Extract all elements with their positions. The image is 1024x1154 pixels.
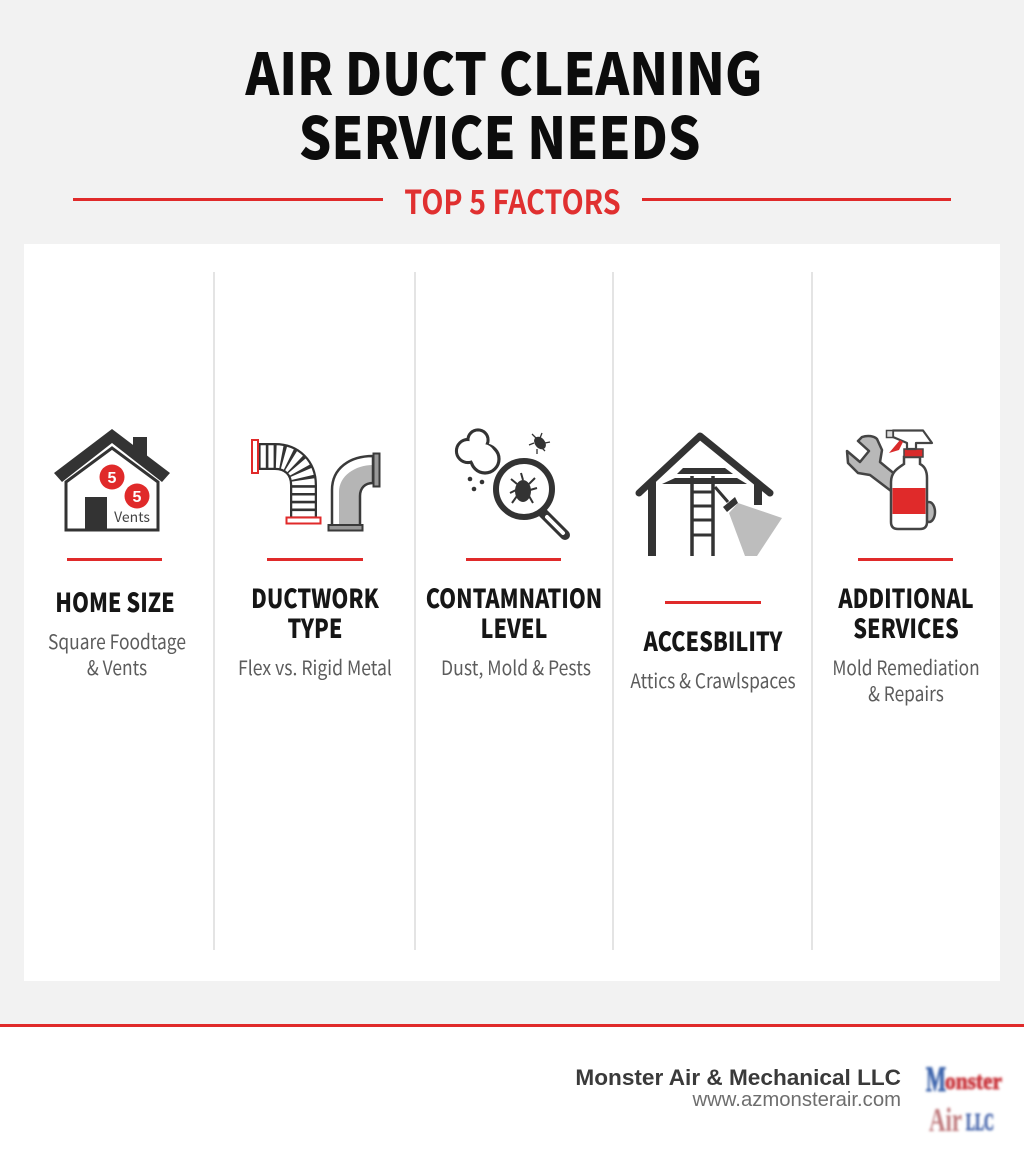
company name: Monster Air & Mechanical LLC [575,1065,901,1090]
column: accessibility [630,601,796,694]
heading [838,579,974,646]
heading [251,579,380,646]
description: Flex vs. Rigid Metal [238,652,392,681]
description: Mold Remediation [832,652,980,681]
icon: attic with ladder and flashlight [636,432,782,556]
heading: LEVEL [481,609,547,646]
column: home size [48,558,186,681]
description: & Vents [86,652,147,681]
subtitle with rules [73,176,951,224]
column: contamination level [426,558,602,681]
footer [0,1024,1024,1154]
description: Square Foodtage [48,626,185,655]
heading [426,579,602,646]
title: SERVICE NEEDS [299,92,700,176]
icon: house with vents: Vents [114,507,150,527]
heading: TYPE [288,609,342,646]
heading: CONTAMNATION [426,579,602,616]
icon: house with vents [54,429,170,532]
column: ductwork type [238,558,392,681]
panel: factors [24,244,1000,981]
heading: DUCTWORK [251,579,379,616]
title [245,28,762,176]
icon: house with vents: 5 [133,489,142,506]
subtitle text: TOP 5 FACTORS [404,176,621,224]
heading: HOME SIZE [55,583,175,620]
logo [924,1059,1004,1137]
icon: flex and rigid duct [251,439,380,532]
heading: SERVICES [853,609,959,646]
icon: house with vents: 5 [108,470,117,487]
description: Dust, Mold & Pests [441,652,591,681]
heading: ACCESBILITY [644,622,782,659]
description: & Repairs [868,678,944,707]
logo: onster [945,1069,1002,1095]
icon: wrench and spray bottle [846,429,936,530]
logo: M [926,1059,946,1099]
description [48,626,186,681]
icon: magnifier with dust and pests [454,428,570,540]
description [832,652,980,707]
heading: ADDITIONAL [838,579,974,616]
description: Attics & Crawlspaces [630,665,796,694]
website: www.azmonsterair.com [692,1089,901,1111]
column: additional services [832,558,980,707]
title: AIR DUCT CLEANING [246,28,762,112]
